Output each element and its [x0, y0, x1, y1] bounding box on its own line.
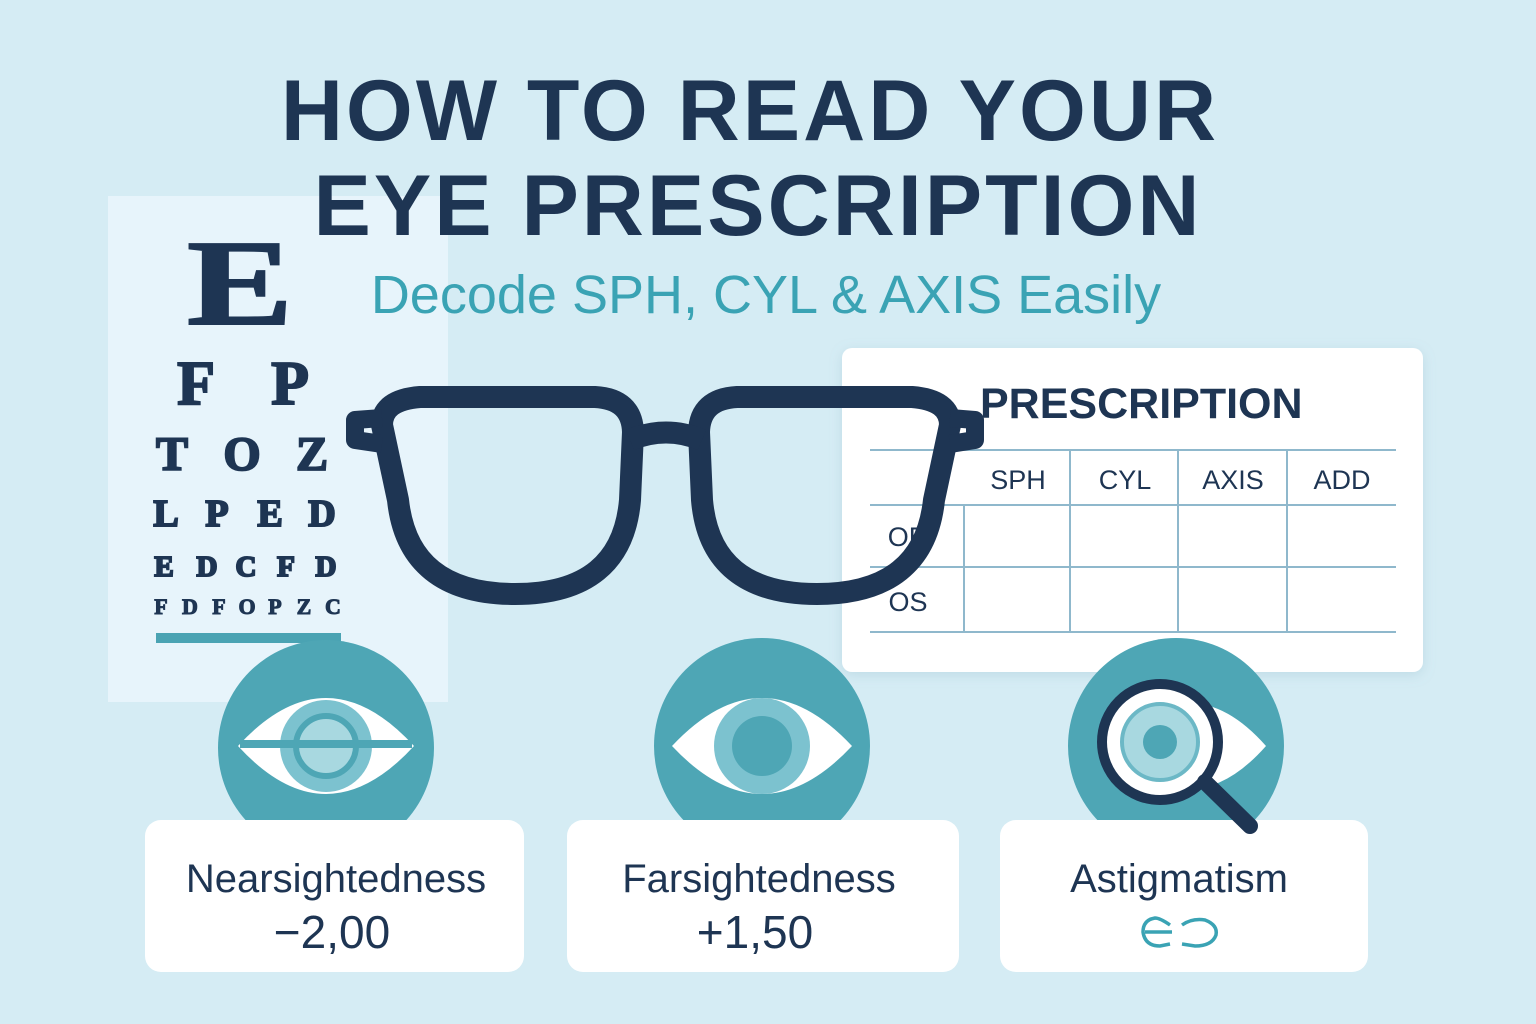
panel: prescription card: PRESCRIPTION	[980, 380, 1303, 428]
card: nearsightedness	[145, 820, 524, 972]
card: astigmatism: Astigmatism	[1070, 857, 1288, 901]
card: nearsightedness: Nearsightedness	[186, 857, 486, 901]
title	[281, 63, 1219, 254]
panel: eye chart: O	[223, 428, 261, 481]
title: EYE PRESCRIPTION	[313, 158, 1203, 254]
card: farsightedness: Farsightedness	[622, 857, 896, 901]
panel: eye chart: D	[308, 493, 336, 535]
panel: prescription card: AXIS	[1202, 465, 1264, 495]
panel: prescription card: OD	[888, 522, 928, 552]
panel: eye chart: P	[268, 594, 282, 619]
card: farsightedness: +1,50	[697, 906, 813, 958]
subtitle: Decode SPH, CYL & AXIS Easily	[371, 265, 1161, 325]
panel: eye chart: Z	[297, 594, 311, 619]
panel: eye chart: P	[205, 493, 229, 535]
panel: eye chart: D	[182, 594, 198, 619]
panel: prescription card: OS	[888, 587, 928, 617]
panel: eye chart	[108, 196, 448, 702]
panel: eye chart: D	[316, 551, 336, 583]
icon: nearsighted eye	[218, 640, 434, 856]
card: farsightedness	[567, 820, 959, 972]
panel: eye chart: L	[153, 493, 179, 535]
panel: eye chart: F	[177, 350, 215, 418]
panel: eye chart: F	[154, 594, 168, 619]
icon: magnifier handle	[1205, 782, 1250, 826]
icon: farsighted eye	[654, 638, 870, 854]
panel: eye chart: F	[212, 594, 226, 619]
panel: eye chart: P	[271, 350, 309, 418]
icon: glasses	[355, 397, 975, 594]
title: HOW TO READ YOUR	[281, 63, 1219, 159]
panel: eye chart: E	[154, 551, 174, 583]
panel: eye chart: T	[156, 428, 188, 481]
panel: prescription card: CYL	[1099, 465, 1151, 495]
panel: eye chart: C	[236, 551, 256, 583]
icon: astigmatism magnifier	[1068, 638, 1284, 854]
panel: prescription card: SPH	[990, 465, 1046, 495]
panel: eye chart: O	[238, 594, 256, 619]
panel: eye chart: E	[257, 493, 283, 535]
panel: prescription card: ADD	[1313, 465, 1371, 495]
panel: eye chart: Z	[296, 428, 328, 481]
panel: eye chart: C	[325, 594, 341, 619]
panel: eye chart: E	[187, 215, 293, 351]
card: nearsightedness: −2,00	[274, 906, 390, 958]
panel: prescription card	[842, 348, 1423, 672]
panel: eye chart: D	[197, 551, 217, 583]
panel: eye chart: F	[277, 551, 295, 583]
card: astigmatism	[1000, 820, 1368, 972]
